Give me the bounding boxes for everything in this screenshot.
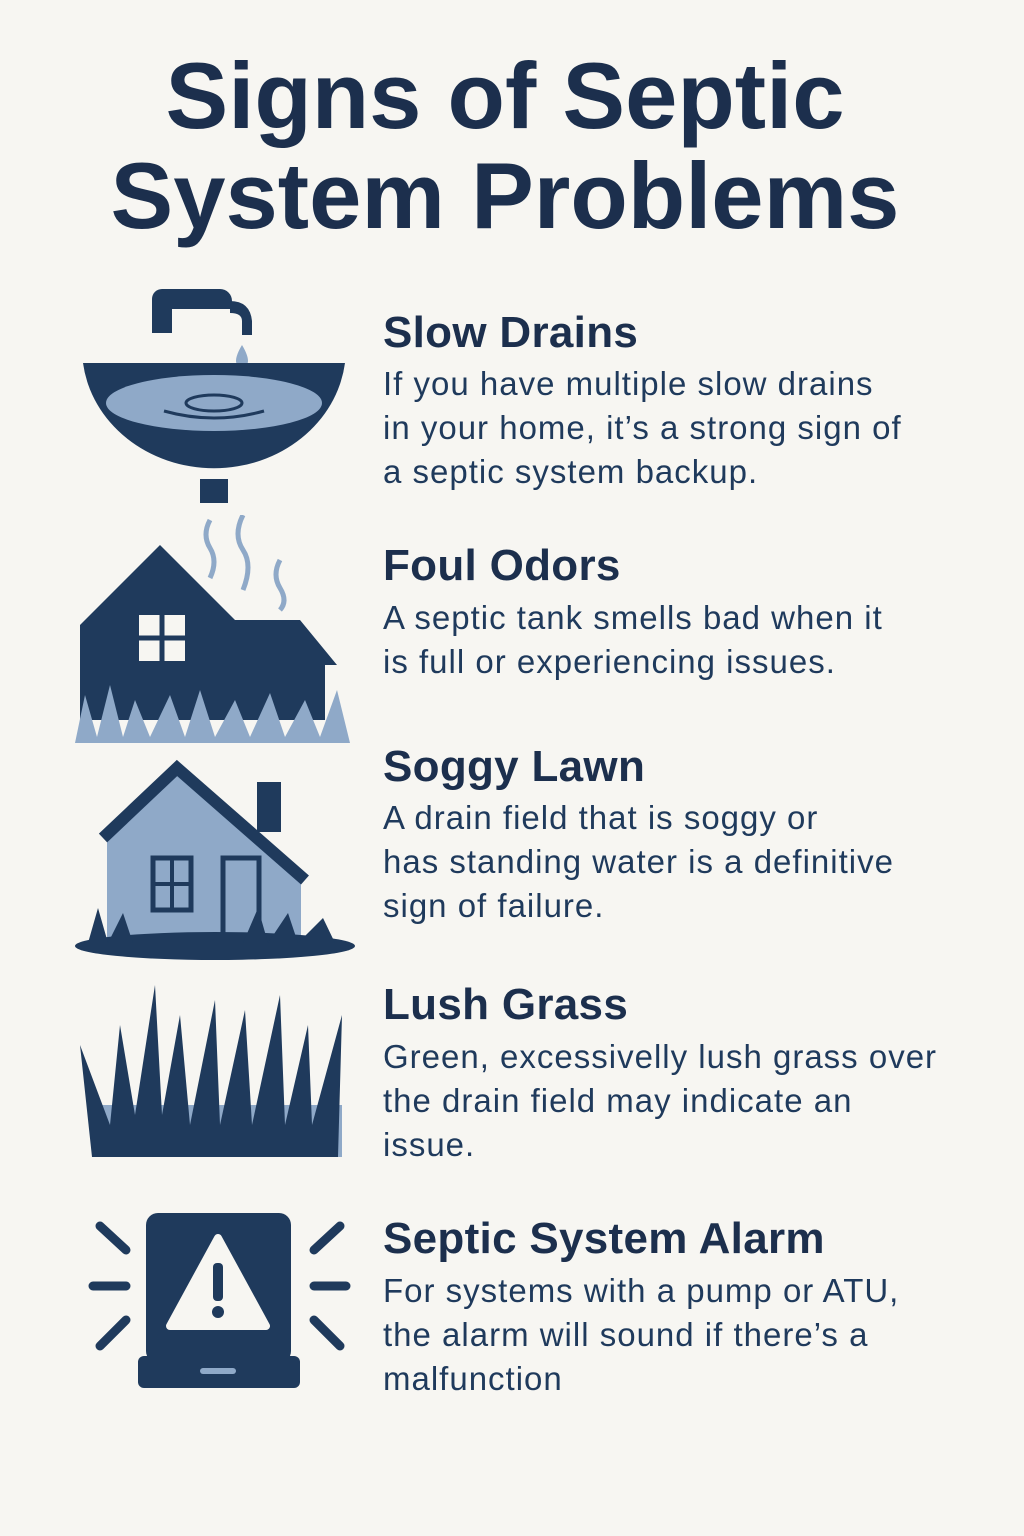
icon: house with odor bbox=[75, 515, 350, 743]
icon: lush grass bbox=[80, 985, 342, 1157]
heading: septic system alarm: Septic System Alarm bbox=[383, 1214, 825, 1263]
text: foul odors bbox=[383, 599, 883, 680]
heading: slow drains: Slow Drains bbox=[383, 308, 638, 357]
text: lush grass: Green, excessivelly lush grass over bbox=[383, 1038, 937, 1075]
text: soggy lawn: A drain field that is soggy or bbox=[383, 799, 818, 836]
text: foul odors: is full or experiencing issues. bbox=[383, 643, 836, 680]
heading: foul odors: Foul Odors bbox=[383, 541, 621, 590]
text: soggy lawn bbox=[383, 799, 894, 924]
text: lush grass: the drain field may indicate an bbox=[383, 1082, 852, 1119]
text: septic system alarm: For systems with a pump or ATU, bbox=[383, 1272, 899, 1309]
text: septic system alarm bbox=[383, 1272, 899, 1397]
text: foul odors: A septic tank smells bad when it bbox=[383, 599, 883, 636]
icon: house soggy lawn bbox=[75, 760, 355, 960]
icon: sink bbox=[83, 289, 345, 503]
title: Signs of Septic bbox=[166, 43, 844, 148]
text: lush grass: issue. bbox=[383, 1126, 475, 1163]
heading: lush grass: Lush Grass bbox=[383, 980, 628, 1029]
title bbox=[111, 43, 899, 248]
text: soggy lawn: has standing water is a definitive bbox=[383, 843, 894, 880]
text: slow drains: in your home, it’s a strong sign of bbox=[383, 409, 902, 446]
text: slow drains: a septic system backup. bbox=[383, 453, 758, 490]
text: soggy lawn: sign of failure. bbox=[383, 887, 604, 924]
text: slow drains bbox=[383, 365, 902, 490]
icon: alarm bbox=[88, 1213, 350, 1388]
heading: soggy lawn: Soggy Lawn bbox=[383, 742, 645, 791]
text: septic system alarm: malfunction bbox=[383, 1360, 563, 1397]
text: septic system alarm: the alarm will sound if there’s a bbox=[383, 1316, 868, 1353]
text: slow drains: If you have multiple slow drains bbox=[383, 365, 874, 402]
title: System Problems bbox=[111, 143, 899, 248]
text: lush grass bbox=[383, 1038, 937, 1163]
